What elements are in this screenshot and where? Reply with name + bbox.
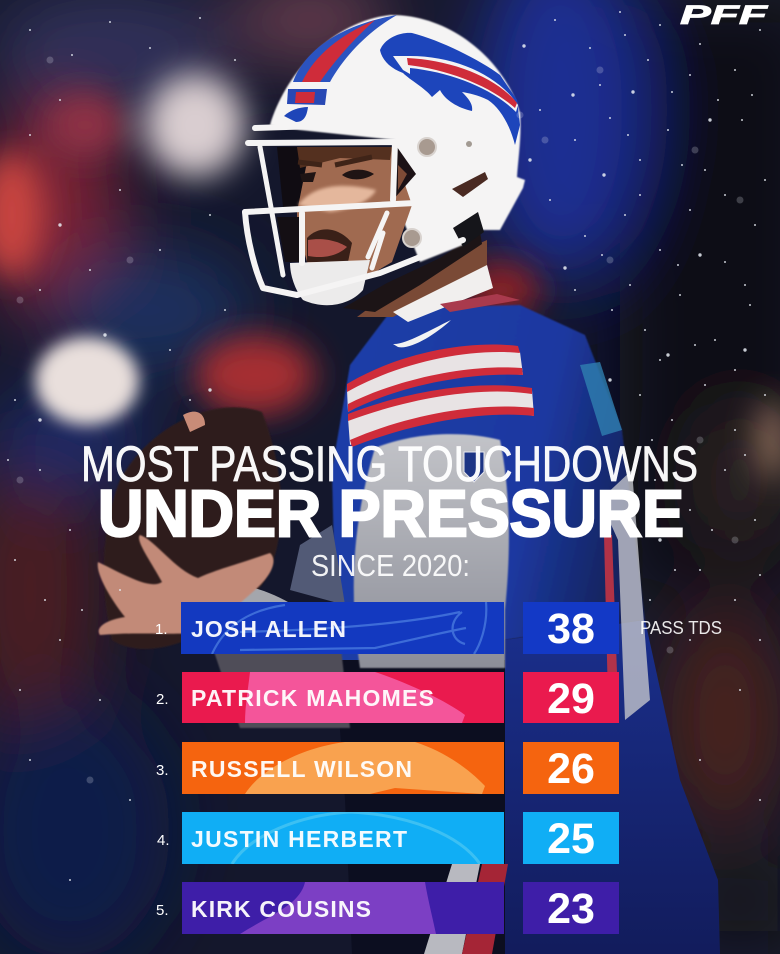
bar logo: bills	[212, 602, 486, 654]
subtitle: since 2020: SINCE 2020:	[311, 548, 470, 583]
jersey number red trim	[604, 535, 618, 700]
score 29: 29	[547, 675, 595, 723]
helmet shell	[270, 15, 525, 262]
name: Kirk Cousins: KIRK COUSINS	[191, 896, 371, 922]
title: under pressure: UNDER PRESSURE	[98, 476, 684, 550]
unit label: PASS TDS	[640, 618, 722, 638]
rank 3: 3.	[156, 762, 169, 779]
rank 5: 5.	[156, 902, 169, 919]
name: Justin Herbert: JUSTIN HERBERT	[191, 826, 407, 852]
nose highlight	[298, 186, 376, 212]
score 38: 38	[547, 605, 595, 653]
helmet center stripe	[293, 15, 397, 82]
bar logo: broncos	[245, 742, 485, 794]
bar logo: vikings	[240, 882, 436, 934]
red shoulder stripes	[347, 345, 534, 447]
brow	[298, 157, 372, 165]
dark side of helmet opening	[392, 147, 416, 201]
helmet ear hole	[466, 141, 472, 147]
face	[297, 147, 412, 290]
rank 4: 4.	[157, 832, 170, 849]
score 26: 26	[547, 745, 595, 793]
grey inner arm	[354, 434, 509, 668]
helmet black clip	[453, 212, 484, 247]
helmet lower snap	[403, 229, 421, 247]
ear skin	[398, 165, 407, 190]
forehead shadow	[297, 147, 392, 168]
blurred white crowd blob	[35, 337, 139, 425]
mustache and mouth	[307, 229, 352, 262]
throwing hand	[98, 535, 274, 635]
lower torso: dark shadow	[335, 660, 510, 954]
eyes	[300, 170, 374, 182]
forearm sleeve	[205, 586, 350, 728]
bar logo: chiefs	[245, 672, 465, 725]
row 5: Kirk Cousins	[156, 882, 619, 934]
name bar: Kirk Cousins	[182, 882, 504, 934]
row 4: Justin Herbert	[157, 812, 619, 864]
small bills logo	[284, 107, 308, 122]
stripe lower block	[287, 89, 327, 105]
name: Josh Allen: JOSH ALLEN	[191, 616, 346, 642]
shoulder stripes	[347, 350, 534, 445]
ball upper fingers	[183, 412, 205, 432]
score box	[523, 812, 619, 864]
rank 1: 1.	[155, 621, 168, 638]
collar	[393, 265, 493, 322]
score box	[523, 672, 619, 723]
lower face shadow	[277, 217, 303, 262]
chin cup	[290, 260, 370, 305]
glove sleeve	[290, 525, 345, 605]
beard shadow	[343, 232, 482, 312]
score box	[523, 602, 619, 654]
name plate on sleeve	[580, 362, 622, 436]
torso jersey	[332, 305, 645, 720]
rank 2: 2.	[156, 691, 169, 708]
row 2: Patrick Mahomes	[156, 672, 619, 725]
light wrist band	[205, 584, 295, 612]
left eye socket shadow	[277, 147, 310, 207]
NFL shield	[464, 452, 484, 482]
nike swoosh	[393, 320, 451, 347]
name bar: Josh Allen	[181, 602, 504, 654]
score box	[523, 882, 619, 934]
collar stripe	[440, 294, 520, 312]
row 1: Josh Allen	[155, 602, 722, 654]
bar logo: chargers	[232, 812, 480, 864]
facemask bars	[245, 122, 463, 295]
score box	[523, 742, 619, 794]
lips	[308, 239, 347, 257]
jersey number white	[600, 470, 650, 720]
football	[104, 407, 281, 649]
bottom stripe	[424, 864, 480, 954]
logo: PFF: PFF	[680, 0, 770, 30]
name bar: Patrick Mahomes	[182, 672, 504, 723]
name: Patrick Mahomes: PATRICK MAHOMES	[191, 685, 434, 711]
player: Josh Allen	[98, 15, 720, 954]
helmet vent	[452, 172, 488, 197]
score 23: 23	[547, 885, 595, 933]
score 25: 25	[547, 815, 595, 863]
row 3: Russell Wilson	[156, 742, 619, 794]
lower torso: navy side	[505, 620, 720, 954]
name: Russell Wilson: RUSSELL WILSON	[191, 756, 412, 782]
helmet snaps	[418, 138, 436, 156]
name bar: Justin Herbert	[182, 812, 504, 864]
neck	[357, 240, 487, 317]
bills logo on helmet	[380, 33, 520, 145]
name bar: Russell Wilson	[182, 742, 504, 794]
